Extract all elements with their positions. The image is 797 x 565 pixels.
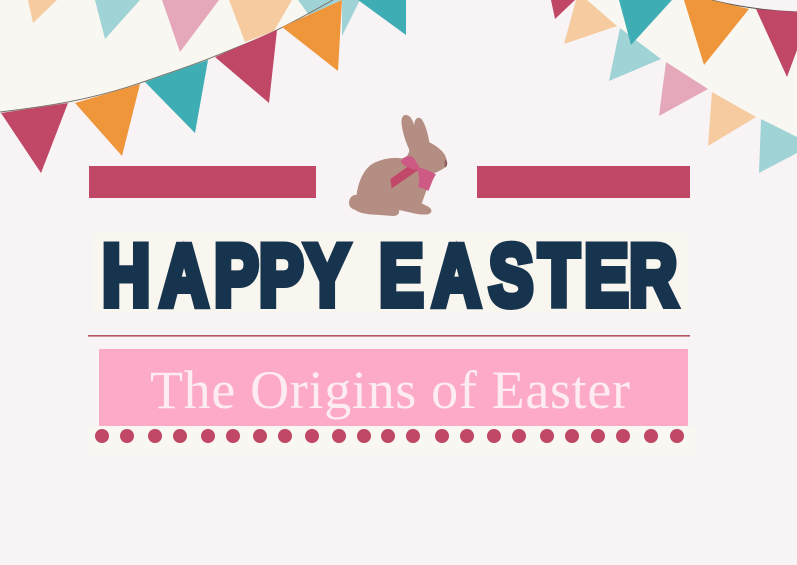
bow: right tail bbox=[416, 167, 436, 191]
flag: small crimson bbox=[551, 0, 575, 19]
flag: peach two bbox=[708, 92, 756, 146]
flag: orange one bbox=[75, 84, 140, 156]
bunting string bbox=[711, 0, 797, 12]
flag: orange two bbox=[282, 0, 342, 71]
flag: pink bbox=[659, 62, 708, 116]
title backing bbox=[92, 233, 687, 312]
back flag: pink bbox=[162, 0, 219, 52]
subtitle band bbox=[99, 349, 688, 426]
bow: diagonal ribbon bbox=[390, 165, 418, 188]
flag: crimson two bbox=[215, 30, 277, 103]
nose bbox=[444, 159, 447, 168]
right banner bar bbox=[477, 166, 690, 198]
panel: left bunting bbox=[0, 0, 406, 173]
back flag: light teal behind orange bbox=[298, 0, 360, 36]
flag: light teal one bbox=[609, 28, 661, 81]
dotted border bbox=[88, 426, 696, 455]
flag: teal bbox=[145, 60, 208, 133]
bunting string bbox=[0, 0, 333, 112]
title: Happy Easter bbox=[102, 229, 677, 324]
back flag: peach bbox=[28, 0, 57, 23]
title word: Easter: EASTER bbox=[379, 229, 677, 324]
bow: upper wing bbox=[401, 156, 419, 170]
top corner above string bbox=[711, 0, 797, 12]
subtitle: The Origins of Easter: The Origins of Easter bbox=[150, 360, 630, 420]
flag: crimson one bbox=[1, 103, 68, 173]
back flag: peach cut by string bbox=[229, 0, 292, 42]
flag: teal bbox=[619, 0, 672, 45]
flag: orange bbox=[684, 0, 749, 65]
back flag: teal bbox=[358, 0, 406, 35]
back flag: light teal bbox=[95, 0, 140, 39]
title word: Happy: HAPPY bbox=[102, 229, 349, 324]
panel: right bunting bbox=[551, 0, 797, 173]
flag: peach one bbox=[564, 0, 617, 44]
flag: light teal two bbox=[759, 119, 797, 173]
flag: crimson bbox=[756, 9, 797, 77]
icon: bunny with bow bbox=[349, 115, 447, 216]
left banner bar bbox=[89, 166, 316, 198]
divider rule bbox=[88, 335, 690, 337]
